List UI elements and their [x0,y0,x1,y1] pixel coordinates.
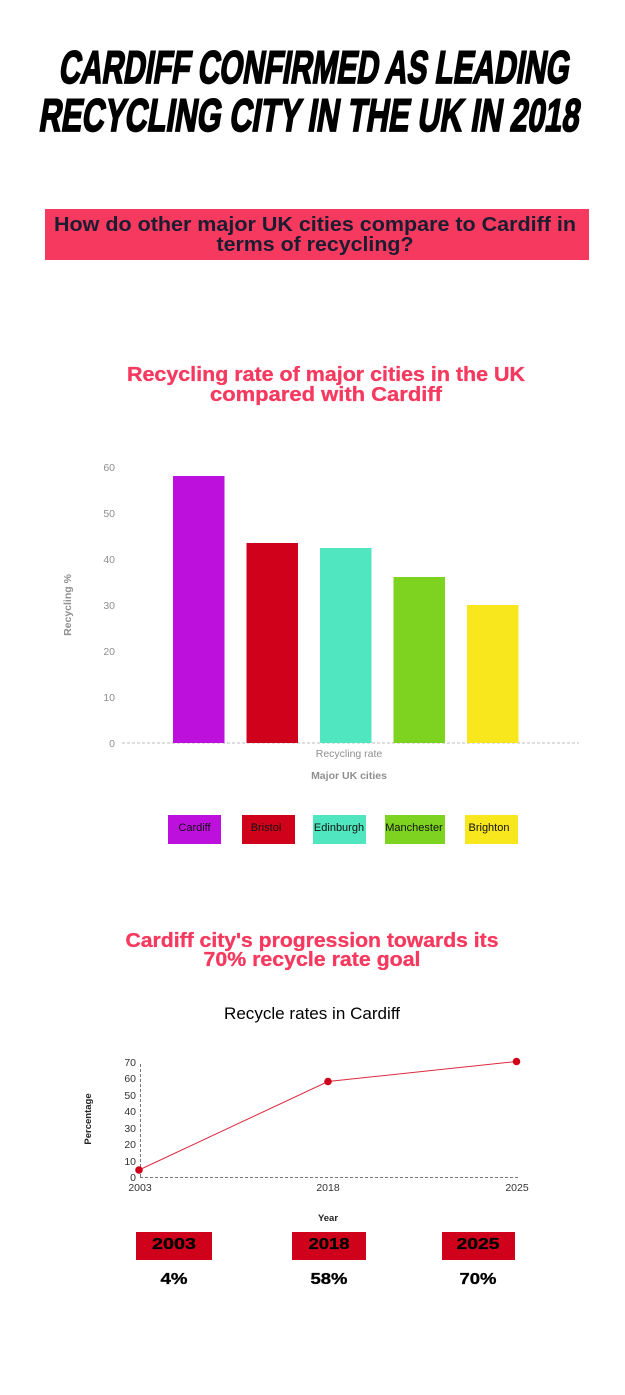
y axis labels: 0 [109,738,115,750]
x axis labels [128,1182,529,1194]
data line [135,1058,520,1174]
y axis labels: 60 [103,462,115,474]
banner: section question [45,209,589,260]
bars [173,476,518,743]
card: 2018: 2018 [308,1236,350,1253]
heading: bar chart: compared with Cardiff [210,384,442,406]
legend: Brighton [469,822,509,834]
x axis labels: 2025 [505,1182,529,1194]
heading: line chart: 70% recycle rate goal [204,949,420,971]
x axis labels: 2018 [316,1182,340,1194]
x axis title: Year [318,1213,338,1224]
card: 2003: 2003 [152,1236,196,1253]
legend: Manchester [385,822,443,834]
chart title: Recycle rates in Cardiff [224,1005,400,1023]
legend: Bristol [251,822,281,834]
y axis labels: 20 [124,1139,136,1151]
y axis labels: 30 [124,1123,136,1135]
y axis labels [124,1057,136,1184]
heading: bar chart: Recycling rate of major cities in the UK [127,364,526,386]
card: 2025: 2025 [456,1236,500,1253]
axes [140,1064,518,1178]
card: 2003 [136,1232,212,1288]
heading: bar chart [127,364,526,406]
y axis labels: 30 [103,600,115,612]
y axis labels: 10 [103,692,115,704]
y axis labels [103,462,115,750]
y axis labels: 40 [124,1106,136,1118]
bar chart [62,462,579,782]
y axis labels: 40 [103,554,115,566]
banner: section question: terms of recycling? [216,234,414,256]
heading: line chart [126,930,498,971]
heading: line chart: Cardiff city's progression towards its [126,930,498,952]
y axis labels: 20 [103,646,115,658]
x axis title: Major UK cities [311,770,387,782]
banner: section question: How do other major UK cities compare to Cardiff in [54,214,576,236]
year cards [136,1232,515,1288]
title [36,41,585,141]
y axis labels: 50 [103,508,115,520]
card: 2003: 4% [160,1271,188,1288]
y axis labels: 50 [124,1090,136,1102]
line chart [83,1057,529,1224]
legend: Edinburgh [314,822,364,834]
legend [168,815,518,844]
x axis label: Recycling rate [316,748,382,760]
card: 2018: 58% [310,1271,348,1288]
y axis labels: 70 [124,1057,136,1069]
y axis title: Recycling % [62,573,74,636]
card: 2025: 70% [460,1271,497,1288]
y axis title: Percentage [83,1093,94,1145]
x axis labels: 2003 [128,1182,152,1194]
card: 2025 [442,1232,515,1288]
y axis labels: 10 [124,1156,136,1168]
y axis labels: 0 [130,1172,136,1184]
y axis labels: 60 [124,1073,136,1085]
legend: Cardiff [178,822,212,834]
card: 2018 [292,1232,366,1288]
